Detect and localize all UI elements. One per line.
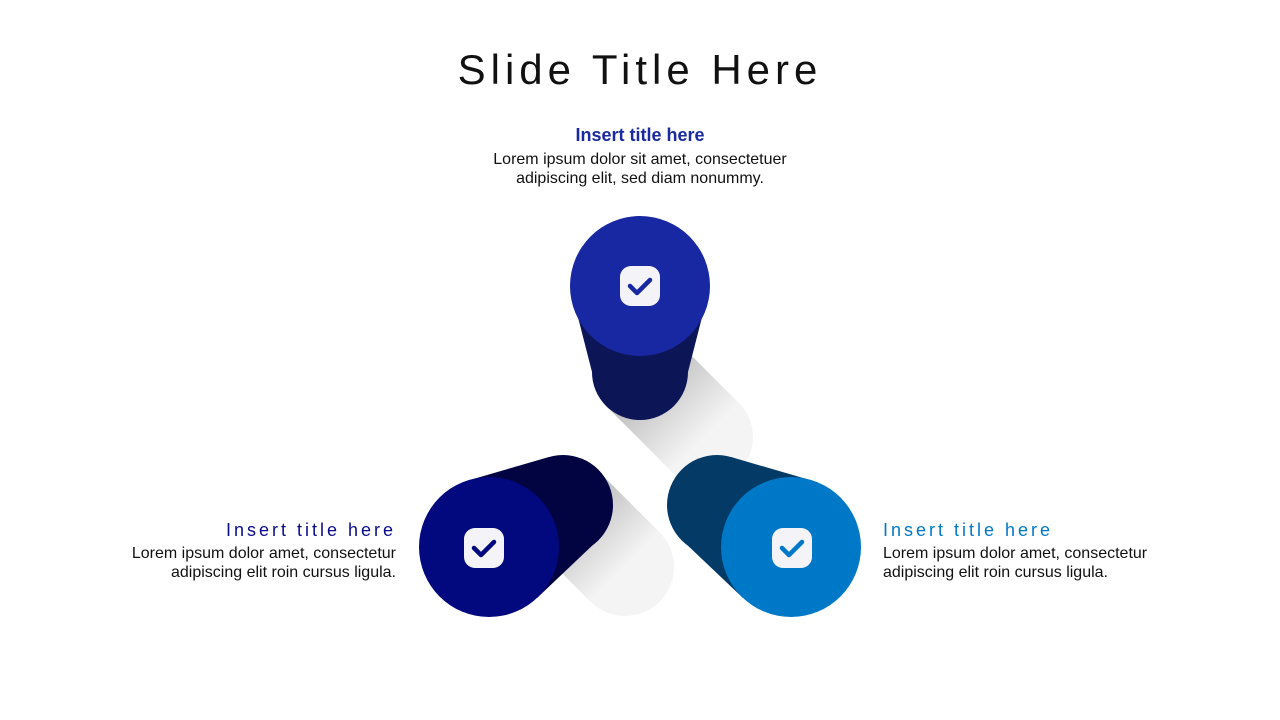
text block: top: Lorem ipsum dolor sit amet, consectetuer xyxy=(493,151,787,168)
text block: right: adipiscing elit roin cursus ligula. xyxy=(883,564,1108,581)
text block: left: Insert title here xyxy=(226,520,396,540)
text block: right: Lorem ipsum dolor amet, consectetur xyxy=(883,545,1147,562)
shadow: left cylinder xyxy=(563,505,625,567)
cylinder: right xyxy=(667,455,861,617)
text block: left: Lorem ipsum dolor amet, consectetur xyxy=(132,545,396,562)
icon: check xyxy=(620,266,660,306)
text block: right xyxy=(883,520,1147,581)
text block: top xyxy=(493,125,787,187)
text block: top: Insert title here xyxy=(575,125,705,145)
shadow: top cylinder xyxy=(640,372,705,437)
cylinder: left xyxy=(419,455,613,617)
icon: check xyxy=(464,528,504,568)
text block: left: adipiscing elit roin cursus ligula. xyxy=(171,564,396,581)
cylinder: top xyxy=(570,216,710,420)
icon: check xyxy=(772,528,812,568)
text block: right: Insert title here xyxy=(883,520,1053,540)
text block: top: adipiscing elit, sed diam nonummy. xyxy=(516,170,764,187)
title: Slide Title Here xyxy=(458,46,822,93)
text block: left xyxy=(132,520,396,581)
